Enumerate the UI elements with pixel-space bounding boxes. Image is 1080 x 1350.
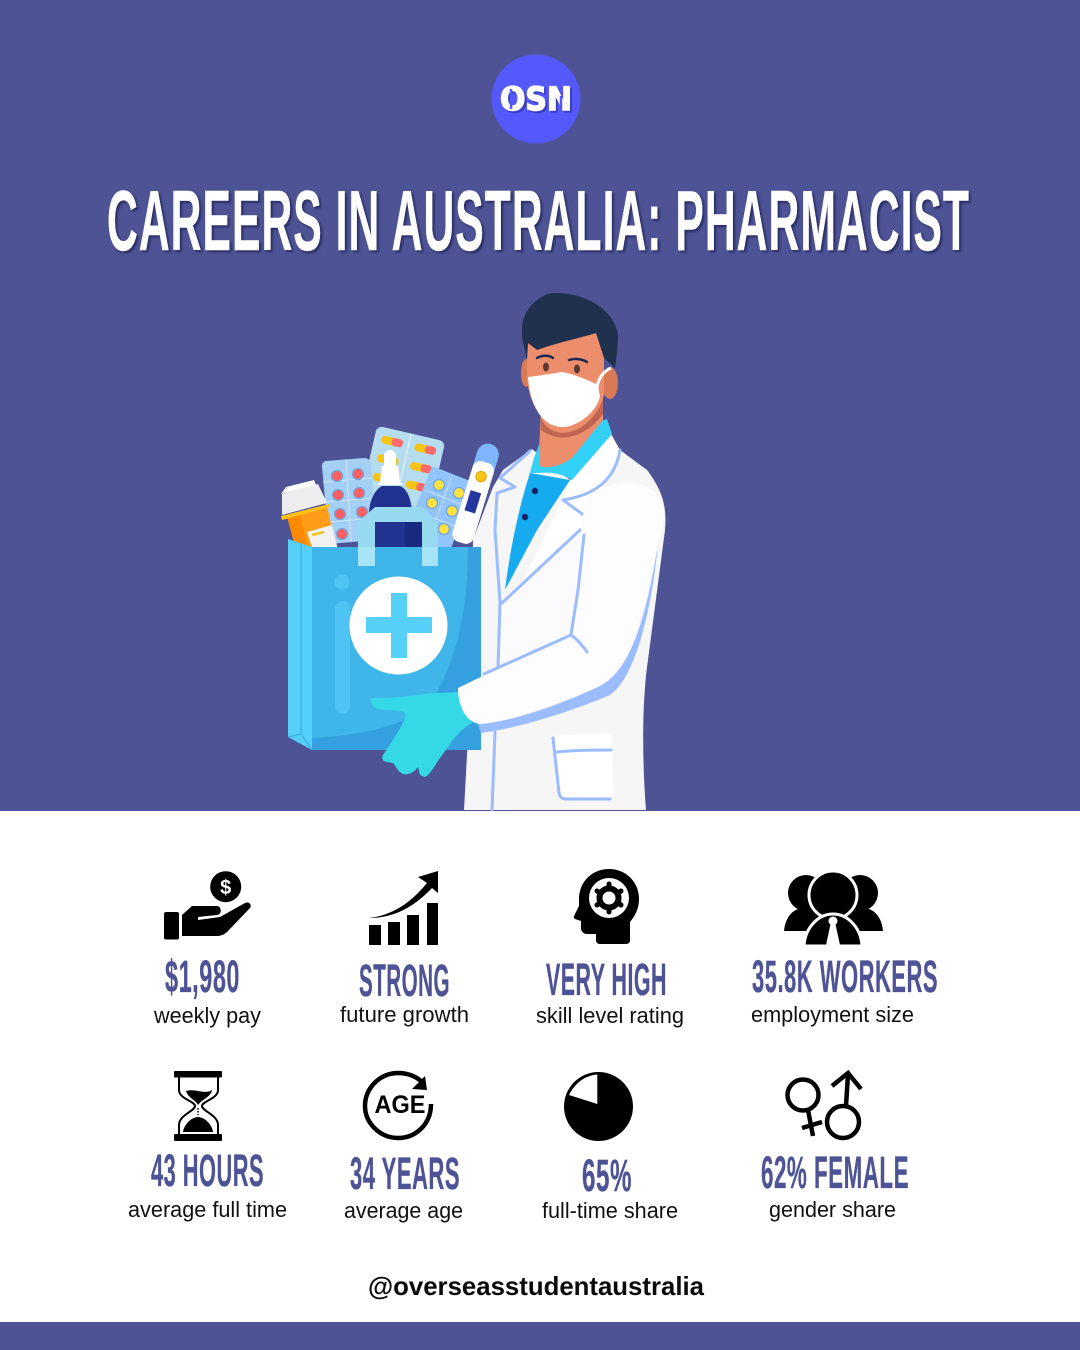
- pharmacist: gloved hand: [371, 692, 472, 777]
- pharmacist: white coat: [464, 432, 665, 810]
- pharmacist: coat sleeve: [458, 483, 665, 733]
- stat: weekly pay: [153, 871, 261, 1028]
- icon: hourglass: [174, 1071, 222, 1141]
- footer: social handle: @overseasstudentaustralia: [368, 1271, 705, 1301]
- stat: future growth: future growth: [340, 1002, 469, 1027]
- stat: average hours: average full time: [128, 1197, 287, 1222]
- illustration: pharmacist with medicine bag: [281, 293, 665, 810]
- medicine bag: [288, 507, 481, 750]
- icon: female and male symbols: [788, 1073, 861, 1138]
- medicine: yellow pill blister pack: [406, 468, 474, 552]
- icon: head with gear: [574, 869, 639, 944]
- pharmacist: shirt and collar: [505, 419, 612, 590]
- icon: hand holding coin: [164, 871, 251, 940]
- icon: hand holding coin: $: [220, 877, 231, 899]
- stat: future growth: [340, 871, 469, 1027]
- stat: skill level: [536, 869, 684, 1028]
- stat: full-time share: 65%: [582, 1150, 632, 1201]
- icon: pie chart: [564, 1072, 633, 1141]
- stat: gender share: [761, 1073, 909, 1222]
- medicine: orange pill bottle: [281, 480, 338, 550]
- stat: full-time share: [542, 1072, 678, 1223]
- medicine: dropper bottle: [369, 450, 412, 552]
- logo: OSN badge: OSN: [500, 80, 572, 118]
- stat: average hours: 43 HOURS: [151, 1145, 264, 1196]
- pharmacist: coat pocket: [553, 733, 613, 799]
- stat: employment size: employment size: [751, 1002, 914, 1027]
- stat: average age: [344, 1073, 463, 1223]
- panel: key statistics: 62% FEMALE: [761, 1147, 909, 1198]
- stat: skill level: VERY HIGH: [546, 954, 667, 1005]
- logo: OSN badge: OSN: [502, 82, 574, 120]
- pharmacist: head: [521, 293, 618, 425]
- stat: gender share: gender share: [769, 1197, 896, 1222]
- stat: average age: 34 YEARS: [350, 1148, 460, 1199]
- logo: OSN badge: [492, 54, 580, 144]
- stat: weekly pay: $1,980: [165, 951, 240, 1002]
- stat: full-time share: full-time share: [542, 1198, 678, 1223]
- stat: average hours: [128, 1071, 287, 1222]
- icon: group of people: [784, 871, 883, 950]
- medicine: back blister pack: [358, 426, 445, 524]
- pharmacist: neck: [539, 395, 603, 467]
- icon: age cycle: [365, 1073, 431, 1138]
- stat: average age: average age: [344, 1198, 463, 1223]
- medicine: red pill blister pack: [322, 458, 376, 544]
- medicine: digital thermometer: [450, 441, 502, 546]
- icon: age cycle: AGE: [374, 1091, 426, 1119]
- stat: employment size: [751, 871, 938, 1027]
- stat: skill level: skill level rating: [536, 1003, 684, 1028]
- stat: future growth: STRONG: [359, 955, 450, 1006]
- icon: rising bar chart: [369, 871, 438, 945]
- stat: weekly pay: weekly pay: [153, 1003, 261, 1028]
- pharmacist: face mask: [528, 368, 611, 427]
- panel: key statistics: [128, 869, 938, 1223]
